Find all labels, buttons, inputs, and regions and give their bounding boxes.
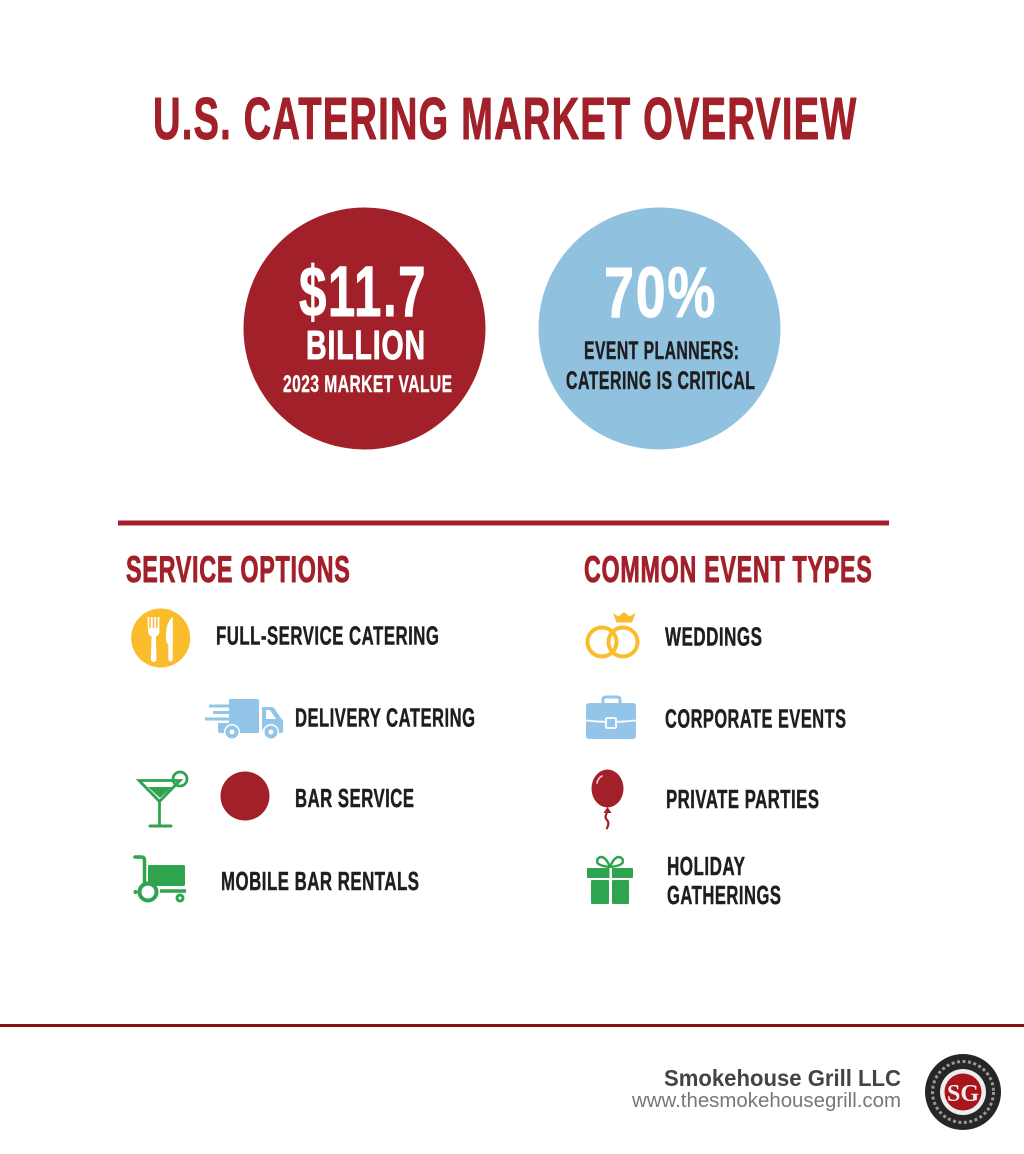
icon: red circle — [220, 772, 270, 820]
panel: common event types — [584, 549, 872, 910]
footer: brand text: Smokehouse Grill LLC — [664, 1065, 901, 1091]
icon: company logo: SG — [947, 1081, 979, 1107]
label: delivery catering: DELIVERY CATERING — [295, 702, 476, 732]
panel: market value stat — [244, 208, 486, 450]
heading: service options: SERVICE OPTIONS — [126, 549, 350, 590]
label: mobile bar rentals: MOBILE BAR RENTALS — [221, 866, 420, 896]
icon: wedding rings — [588, 612, 638, 656]
icon: company logo — [925, 1054, 1001, 1130]
panel: market value stat: $11.7 — [299, 253, 427, 332]
panel: event planners stat: 70% — [604, 254, 717, 333]
panel: market value stat: BILLION — [306, 322, 426, 368]
icon: mobile bar cart — [134, 857, 186, 902]
footer: brand text — [631, 1065, 901, 1112]
label: private parties: PRIVATE PARTIES — [666, 784, 820, 814]
panel: event planners stat: CATERING IS CRITICAL — [566, 367, 756, 395]
panel: event planners stat: EVENT PLANNERS: — [584, 337, 740, 365]
label: bar service: BAR SERVICE — [295, 783, 414, 813]
label: full-service catering: FULL-SERVICE CATERING — [216, 620, 440, 650]
label: holiday gatherings — [667, 851, 782, 910]
footer: brand text: www.thesmokehousegrill.com — [631, 1090, 901, 1112]
panel: market value stat: 2023 MARKET VALUE — [283, 371, 452, 398]
panel: event planners stat — [538, 208, 780, 450]
label: corporate events: CORPORATE EVENTS — [665, 704, 846, 734]
label: holiday gatherings: HOLIDAY — [667, 851, 746, 881]
icon: martini glass — [139, 772, 187, 826]
icon: delivery truck — [205, 699, 283, 740]
panel: service options — [126, 549, 476, 902]
icon: fork and knife — [131, 608, 190, 668]
label: holiday gatherings: GATHERINGS — [667, 880, 782, 910]
icon: briefcase — [586, 697, 636, 739]
icon: gift — [587, 857, 633, 904]
icon: balloon — [592, 770, 624, 829]
label: weddings: WEDDINGS — [665, 622, 762, 652]
